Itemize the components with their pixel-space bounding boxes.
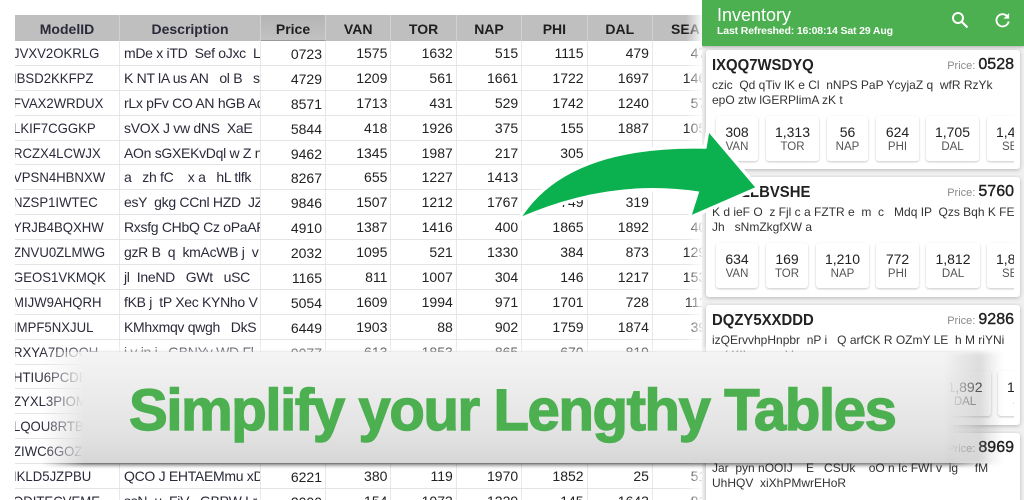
table row 7: 1212 (422, 194, 453, 210)
table row 13 (15, 340, 735, 365)
table row 1: 1575 (356, 45, 387, 61)
table row 5: 1987 (422, 145, 453, 161)
table row 15: ZYXL3PIOM (15, 393, 87, 409)
table row 11: fKB j tP Xec KYNho V (124, 294, 258, 310)
chip DAL: DAL (942, 268, 964, 280)
table row 5: 217 (495, 145, 518, 161)
card 3 stat chips (947, 372, 1014, 418)
card 4 description: Jar pyn nOOIJ E CSUk oO n Ic FWI v ig fM UhHQV xiXhPMwrEHoR (712, 461, 988, 490)
table row 6: 1413 (487, 169, 518, 185)
table row 9: 384 (560, 244, 584, 260)
table row 6: a zh fC x a hL tlfk (124, 169, 251, 185)
table row 12: 397 (691, 319, 714, 335)
table row 18: IKLD5JZPBU (15, 468, 91, 484)
table row 3: 8571 (291, 96, 322, 112)
table row 1: 479 (626, 45, 649, 61)
chip VAN: VAN (726, 268, 748, 280)
card 4 (706, 433, 1020, 500)
chip NAP: NAP (836, 141, 859, 153)
table row 11: 5054 (291, 295, 322, 311)
chip DAL (939, 371, 991, 416)
table row 1: 1115 (554, 45, 584, 61)
table row 8: 405 (691, 219, 714, 235)
panel: phone app inventory (702, 0, 1024, 500)
chip TOR (766, 116, 819, 161)
table row 13: 613 (364, 344, 387, 360)
table row 11: MIJW9AHQRH (15, 294, 101, 310)
table row 2: K NT lA us AN ol B s (124, 70, 260, 86)
table row 6: 8267 (291, 170, 322, 186)
table header row: DAL (605, 21, 634, 37)
table row 11: 1114 (685, 294, 714, 310)
table row 2 (15, 66, 735, 91)
table row 11: 1609 (356, 294, 387, 310)
table row 9: 1330 (487, 244, 518, 260)
table row 5: 305 (560, 145, 584, 161)
table row 18: 1970 (487, 468, 518, 484)
table row 16 (15, 414, 735, 439)
card 1 (706, 50, 1020, 169)
headline: Simplify your Lengthy Tables (129, 378, 896, 443)
table row 3: 573 (691, 95, 714, 111)
card 1 price: Price: 0528 (947, 56, 1014, 73)
table row 3: 529 (495, 95, 518, 111)
table row 6: 1227 (422, 169, 453, 185)
table row 7: NZSP1IWTEC (15, 194, 98, 210)
card 2 price: Price: 5760 (947, 183, 1014, 200)
table row 12 (15, 315, 735, 340)
table row 10: 1165 (292, 270, 322, 286)
chip DAL: DAL (941, 141, 964, 153)
table row 12: 1903 (356, 319, 387, 335)
table row 3: 431 (429, 95, 453, 111)
table row 12: 6449 (291, 320, 322, 336)
fade at panel edge (686, 0, 703, 500)
table row 8: 400 (495, 219, 518, 235)
table row 8: 1865 (552, 219, 584, 235)
table row 13: 670 (560, 344, 584, 360)
table row 10: 146 (560, 269, 584, 285)
table row 5: RCZX4LCWJX (15, 145, 101, 161)
table row 5: 1345 (356, 145, 387, 161)
table row 18: 380 (364, 468, 387, 484)
chip NAP (816, 243, 869, 288)
table row 3: 1742 (552, 95, 584, 111)
table row 1: 0723 (291, 46, 322, 62)
table row 9: 1295 (683, 244, 714, 260)
card 3 price: Price: 9286 (947, 311, 1014, 328)
table row 6: VPSN4HBNXW (15, 169, 105, 185)
table row 9 (15, 240, 735, 265)
table row 17 (15, 439, 735, 464)
table row 18 (15, 464, 735, 489)
table row 18: 1852 (552, 468, 584, 484)
table row 11: 1701 (552, 294, 584, 310)
table row 5: 9462 (291, 146, 322, 162)
icon: refresh (996, 13, 1010, 28)
table header row: Price (276, 21, 310, 37)
table row 3: rLx pFv CO AN hGB Ad (124, 95, 261, 111)
table row 4: 375 (495, 120, 518, 136)
table row 8: 1416 (422, 219, 453, 235)
card 3 (706, 305, 1020, 425)
chip TOR: TOR (780, 141, 805, 153)
card 2 model id: TYK2LBVSHE (712, 184, 810, 201)
card 3 model id: DQZY5XXDDD (712, 312, 814, 329)
chip TOR: 169 (775, 251, 799, 267)
chip DAL (926, 243, 980, 288)
table row 4: 1050 (683, 120, 714, 136)
table row 7: 1767 (487, 194, 518, 210)
table row 5 (15, 141, 735, 165)
table row 3 (15, 91, 735, 116)
table row 13: 9077 (291, 345, 322, 361)
chip NAP: 56 (840, 124, 855, 140)
table header row: NAP (474, 21, 504, 37)
table row 4: 155 (560, 120, 584, 136)
table row 14 (15, 365, 735, 389)
table row 2: 561 (429, 70, 453, 86)
table header row: Description (151, 21, 228, 37)
table row 3: FVAX2WRDUX (15, 95, 103, 111)
table row 16: LQOU8RTB (15, 418, 84, 434)
table header row: TOR (409, 21, 438, 37)
table row 8: 4910 (291, 220, 322, 236)
chip VAN: 308 (725, 124, 749, 140)
table row 7: 749 (560, 194, 584, 210)
chip PHI (876, 116, 919, 161)
table row 10: 304 (495, 269, 518, 285)
chip DAL: DAL (954, 396, 976, 408)
table row 2: 1697 (618, 70, 649, 86)
table row 18: 512 (691, 468, 714, 484)
table row 1: 1632 (422, 45, 453, 61)
card 1 description: czic Qd qTiv lK e Cl nNPS PaP YcyjaZ q wfR RzYk epO ztw lGERPlimA zK t (712, 78, 993, 106)
table row 9: ZNVU0ZLMWG (15, 244, 105, 260)
table row 13: 1853 (422, 344, 453, 360)
table row 2: 1209 (356, 70, 387, 86)
icon: search (952, 12, 968, 28)
app title: Inventory (717, 5, 791, 25)
table row 12: 1874 (618, 319, 649, 335)
table row 18: 6221 (291, 469, 322, 485)
table row 10 (15, 265, 735, 290)
chip DAL: 1,705 (935, 124, 970, 140)
table row 13: i v in j GBNYv WD Fl (124, 344, 254, 360)
table row 6: 655 (364, 169, 387, 185)
table row 7: 1507 (356, 194, 387, 210)
table row 7 (15, 190, 735, 215)
table row 12: 902 (495, 319, 518, 335)
card 4 price: Price: 8969 (947, 439, 1014, 456)
banner right shade (945, 352, 1003, 464)
table row 17: ZIWC6GOZ (15, 443, 82, 459)
table row 10: 1530 (683, 269, 714, 285)
chip SEA (987, 116, 1024, 161)
table row 9: gzR B q kmAcWB j v (124, 244, 259, 260)
table row 4: 418 (364, 120, 387, 136)
chip SEA (998, 371, 1024, 416)
table row 19 (15, 489, 735, 500)
chip PHI: 624 (886, 124, 909, 140)
chip PHI: PHI (888, 141, 907, 153)
table header row (15, 15, 735, 41)
table row 10: 1217 (618, 269, 649, 285)
table row 12: IMPF5NXJUL (15, 319, 93, 335)
table row 1: mDe x iTD Sef oJxc L (124, 45, 261, 61)
table row 7: 9846 (291, 195, 322, 211)
table row 3: 1713 (356, 95, 387, 111)
table row 3: 1240 (618, 95, 649, 111)
table row 11: 1994 (422, 294, 453, 310)
table row 11: 728 (626, 294, 649, 310)
table row 12: KMhxmqv qwgh DkS (124, 319, 256, 335)
table row 18: 119 (430, 468, 453, 484)
table header row: VAN (344, 21, 372, 37)
table header row: SEA (671, 21, 700, 37)
table row 6 (15, 165, 735, 190)
table row 13: RXYA7DIOOH (15, 344, 98, 360)
table row 1: 515 (495, 45, 518, 61)
table row 2: 1722 (552, 70, 584, 86)
table row 2: 4729 (291, 71, 322, 87)
chip PHI: PHI (888, 268, 907, 280)
table row 1: 476 (691, 45, 714, 61)
table row 1: JVXV2OKRLG (15, 45, 99, 61)
table row 9: 521 (429, 244, 453, 260)
chip TOR: 1,313 (775, 124, 810, 140)
banner background (43, 344, 988, 468)
table row 11 (15, 290, 735, 315)
table row 10: jl IneND GWt uSC (124, 269, 250, 285)
app header bar (702, 0, 1024, 46)
table row 18: QCO J EHTAEMmu xD (124, 468, 261, 484)
table row 2: IBSD2KKFPZ (15, 70, 93, 86)
table row 10: 1007 (422, 269, 453, 285)
table row 12: 1759 (552, 319, 584, 335)
table row 11: 971 (495, 294, 518, 310)
spreadsheet table (15, 15, 714, 500)
chip VAN (716, 243, 758, 288)
chip NAP (827, 116, 868, 161)
table row 8: Rxsfg CHbQ Cz oPaAF (124, 219, 261, 235)
table row 8: 1892 (618, 219, 649, 235)
table row 9: 2032 (291, 245, 322, 261)
table row 1 (15, 41, 735, 66)
table row 2: 1661 (487, 70, 518, 86)
chip PHI (876, 243, 919, 288)
table row 13: 865 (495, 344, 518, 360)
table row 18: 25 (633, 468, 649, 484)
table row 8: YRJB4BQXHW (15, 219, 104, 235)
table row 4: LKIF7CGGKP (15, 120, 96, 136)
chip DAL: 1,892 (947, 379, 983, 395)
table header row: ModelID (40, 21, 94, 37)
table row 5: AOn sGXEKvDql w Z n (124, 145, 261, 161)
table row 15 (15, 389, 735, 414)
chip DAL: 1,812 (935, 251, 971, 267)
chip TOR (766, 243, 808, 288)
table row 4 (15, 116, 735, 141)
chip SEA (987, 243, 1024, 288)
table row 9: 1095 (356, 244, 387, 260)
table row 7: 319 (626, 194, 649, 210)
chip DAL (926, 116, 979, 161)
table row 8: 1387 (356, 219, 387, 235)
table row 4: 1926 (422, 120, 453, 136)
chip PHI: 772 (886, 251, 909, 267)
card 1 model id: IXQQ7WSDYQ (712, 57, 814, 74)
card 2 (706, 177, 1020, 297)
table row 12: 88 (437, 319, 453, 335)
card 2 description: K d ieF O z Fjl c a FZTR e m c Mdq IP Qzs Bqh K FE Jh sNmZkgfXW a (712, 205, 1015, 234)
table row 4: 1887 (618, 120, 649, 136)
chip VAN: VAN (726, 141, 748, 153)
chip VAN: 634 (725, 251, 749, 267)
last refreshed text: Last Refreshed: 16:08:14 Sat 29 Aug (717, 25, 893, 37)
table row 14: HTIU6PCDE (15, 369, 88, 385)
table row 2: 1461 (683, 70, 714, 86)
table row 13: 819 (626, 344, 649, 360)
chip NAP: 1,210 (825, 251, 860, 267)
card 3 description: izQErvvhpHnpbr nP i Q arfCK R OZmY LE h M riYNi nakKIIny gm V r (712, 333, 1004, 362)
chip NAP: NAP (831, 268, 854, 280)
chip VAN (716, 116, 758, 161)
table header row: PHI (543, 21, 566, 37)
table row 10: GEOS1VKMQK (15, 269, 106, 285)
table row 4: 5844 (291, 121, 322, 137)
chip TOR: TOR (775, 268, 799, 280)
card 2 stat chips (715, 244, 1014, 290)
card 1 stat chips (715, 117, 1014, 163)
table row 10: 811 (365, 269, 387, 285)
table row 8 (15, 215, 735, 240)
table row 9: 873 (626, 244, 649, 260)
